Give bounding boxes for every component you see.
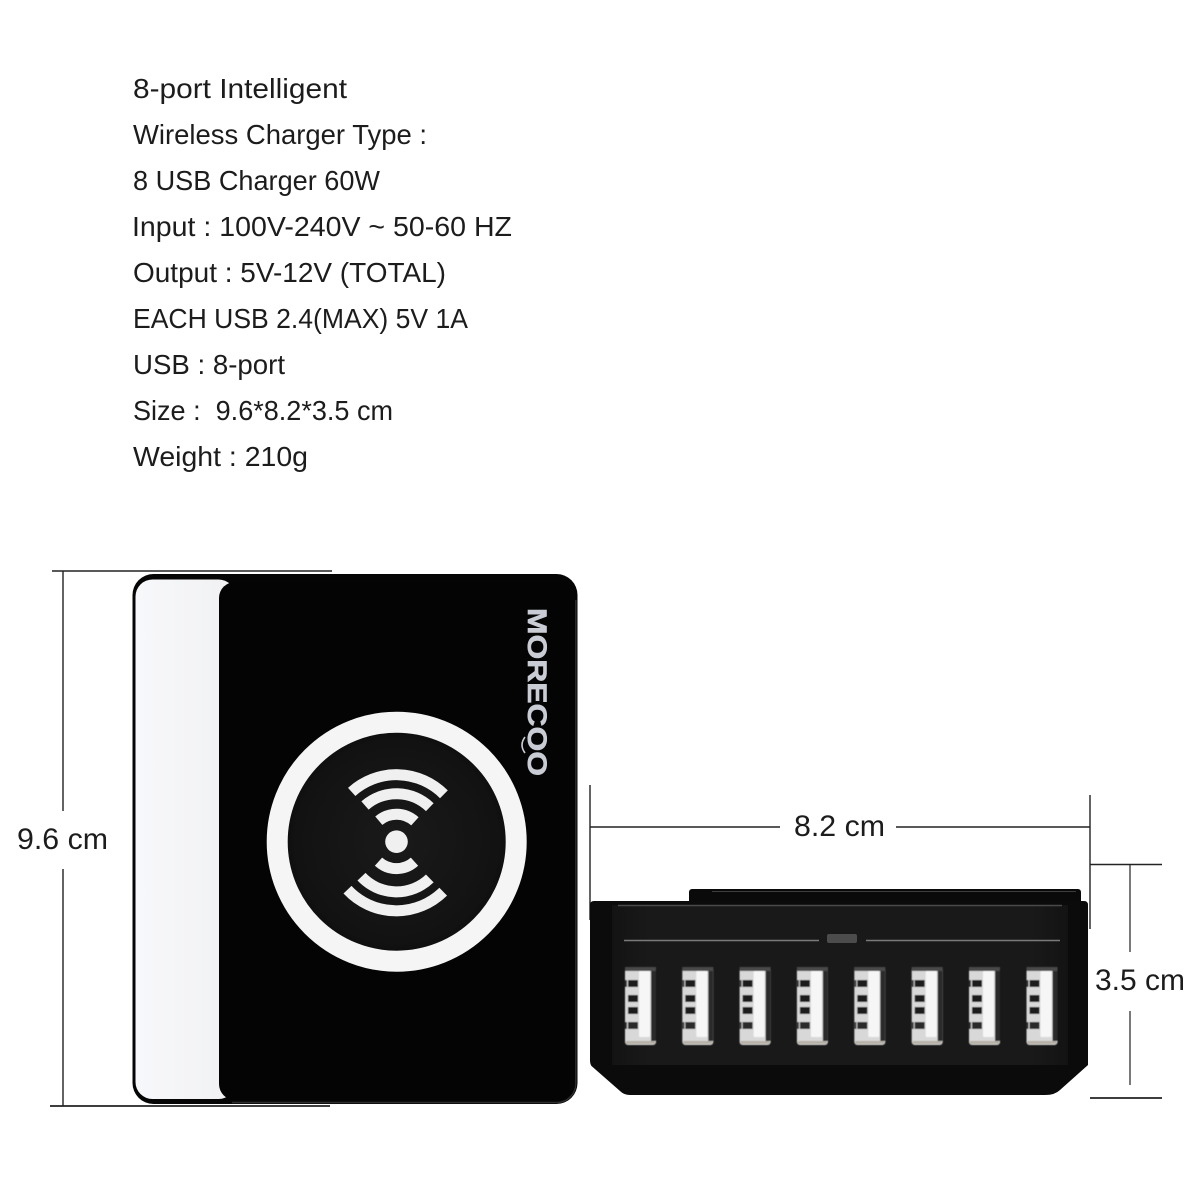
USB port 6 (912, 967, 943, 1045)
white base panel (136, 580, 236, 1099)
LED indicator (827, 934, 857, 943)
spec line: size: Size : 9.6*8.2*3.5 cm (133, 395, 393, 426)
groove lines (624, 940, 1060, 942)
black top panel (219, 582, 577, 1100)
USB port 3 (740, 967, 771, 1045)
charger top view (132, 574, 578, 1104)
label: 9.6 cm: 9.6 cm (17, 823, 108, 856)
spec line: USB ports: USB : 8-port (133, 349, 285, 380)
front face (612, 905, 1068, 1065)
body (590, 901, 1088, 1095)
USB port 2 (682, 967, 713, 1045)
spec line: input: Input : 100V-240V ~ 50-60 HZ (132, 211, 512, 242)
spec line: each USB: EACH USB 2.4(MAX) 5V 1A (133, 303, 469, 334)
icon: wireless signal (348, 775, 444, 911)
charger front view (590, 889, 1088, 1095)
USB port 5 (854, 967, 885, 1045)
label: 3.5 cm: 3.5 cm (1095, 964, 1185, 997)
top plate (689, 889, 1081, 905)
USB port 7 (969, 967, 1000, 1045)
spec line: charger type: Wireless Charger Type : (133, 119, 427, 150)
label: 8.2 cm: 8.2 cm (794, 810, 885, 843)
device outer shell (132, 574, 578, 1104)
brand logo: MORECOO (522, 608, 552, 776)
charging ring (277, 722, 516, 961)
spec line: product name: 8-port Intelligent (133, 73, 347, 104)
USB port 8 (1026, 967, 1058, 1045)
USB port 4 (797, 967, 828, 1045)
specification text block (132, 73, 512, 472)
spec line: USB charger power: 8 USB Charger 60W (133, 165, 380, 196)
spec line: output: Output : 5V-12V (TOTAL) (133, 257, 446, 288)
USB port 1 (625, 967, 656, 1045)
spec line: weight: Weight : 210g (133, 441, 308, 472)
